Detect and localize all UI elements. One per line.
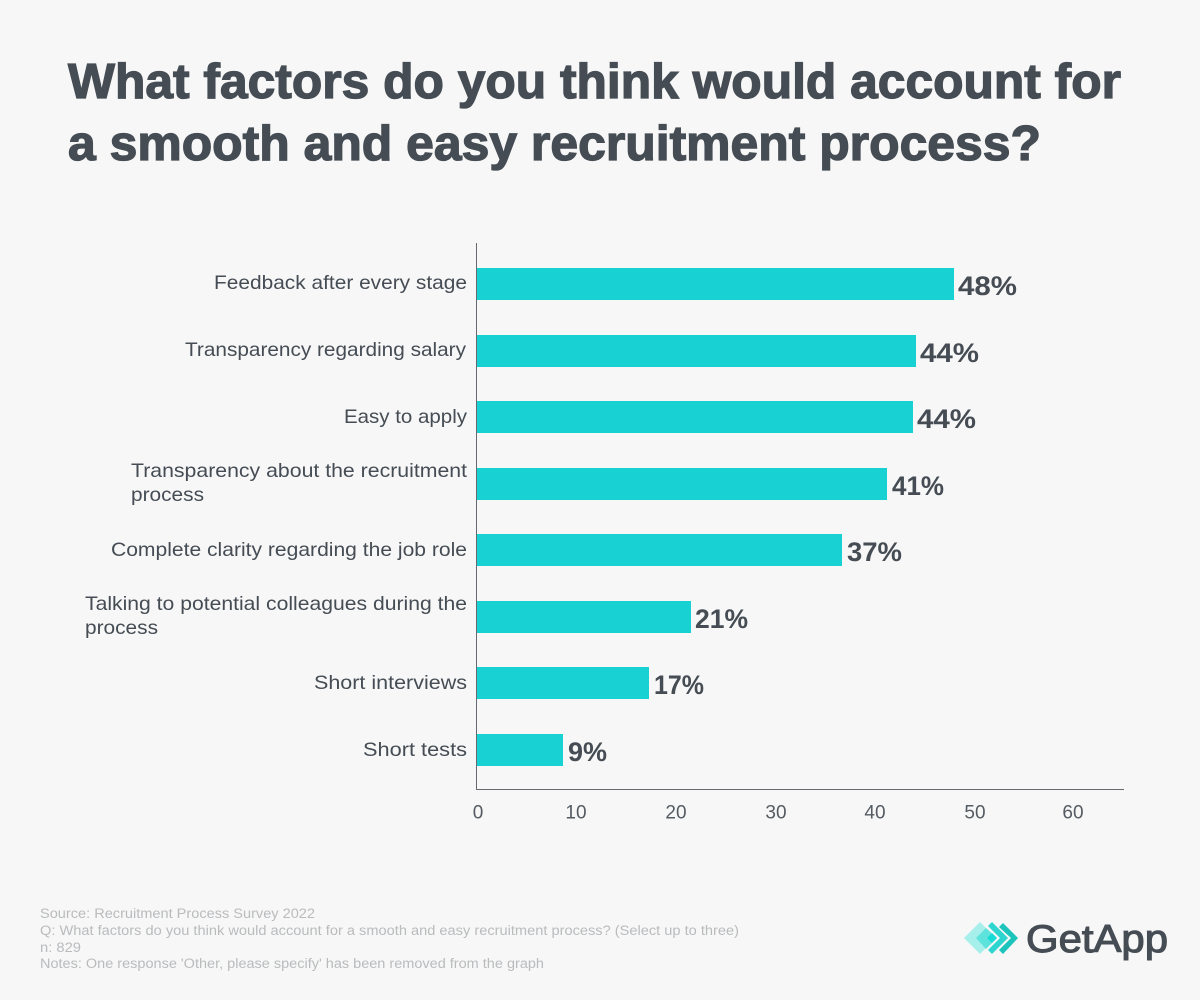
bars	[477, 268, 954, 766]
value labels: 48%	[958, 271, 1017, 301]
category labels: Transparency about the recruitment	[131, 460, 468, 482]
value labels: 44%	[920, 338, 979, 368]
value labels: 21%	[695, 604, 748, 634]
category labels: Talking to potential colleagues during the	[85, 593, 467, 615]
value labels	[568, 271, 1017, 767]
title	[68, 55, 1121, 171]
x axis ticks: 10	[565, 802, 587, 824]
category labels: Feedback after every stage	[214, 272, 467, 294]
title: What factors do you think would account for	[68, 55, 1121, 109]
category labels: Complete clarity regarding the job role	[111, 539, 467, 561]
x axis ticks: 20	[665, 802, 687, 824]
title: a smooth and easy recruitment process?	[68, 117, 1041, 171]
x axis ticks: 30	[765, 802, 787, 824]
category labels	[85, 272, 468, 761]
value labels: 44%	[917, 404, 976, 434]
category labels: process	[85, 617, 158, 639]
category labels: Short tests	[363, 739, 467, 761]
value labels: 37%	[847, 537, 902, 567]
category labels: Easy to apply	[344, 406, 467, 428]
x axis ticks: 50	[964, 802, 986, 824]
source notes: Source: Recruitment Process Survey 2022	[40, 906, 315, 921]
x axis ticks: 60	[1062, 802, 1084, 824]
source notes: n: 829	[40, 940, 81, 955]
source notes: Q: What factors do you think would account for a smooth and easy recruitment process? (Select up to three)	[40, 923, 739, 938]
axes	[476, 243, 1124, 790]
logo: GetApp	[964, 918, 1168, 961]
category labels: Transparency regarding salary	[185, 339, 466, 361]
value labels: 17%	[654, 670, 704, 700]
source notes	[40, 906, 739, 971]
value labels: 9%	[568, 737, 607, 767]
source notes: Notes: One response 'Other, please specify' has been removed from the graph	[40, 956, 544, 971]
x axis ticks: 40	[864, 802, 886, 824]
value labels: 41%	[892, 471, 944, 501]
x axis ticks	[473, 802, 1084, 824]
icon: logo diamonds	[964, 922, 1018, 954]
x axis ticks: 0	[473, 802, 483, 824]
category labels: Short interviews	[314, 672, 467, 694]
bar chart	[85, 243, 1124, 824]
logo wordmark: GetApp	[1026, 918, 1168, 961]
category labels: process	[131, 484, 204, 506]
